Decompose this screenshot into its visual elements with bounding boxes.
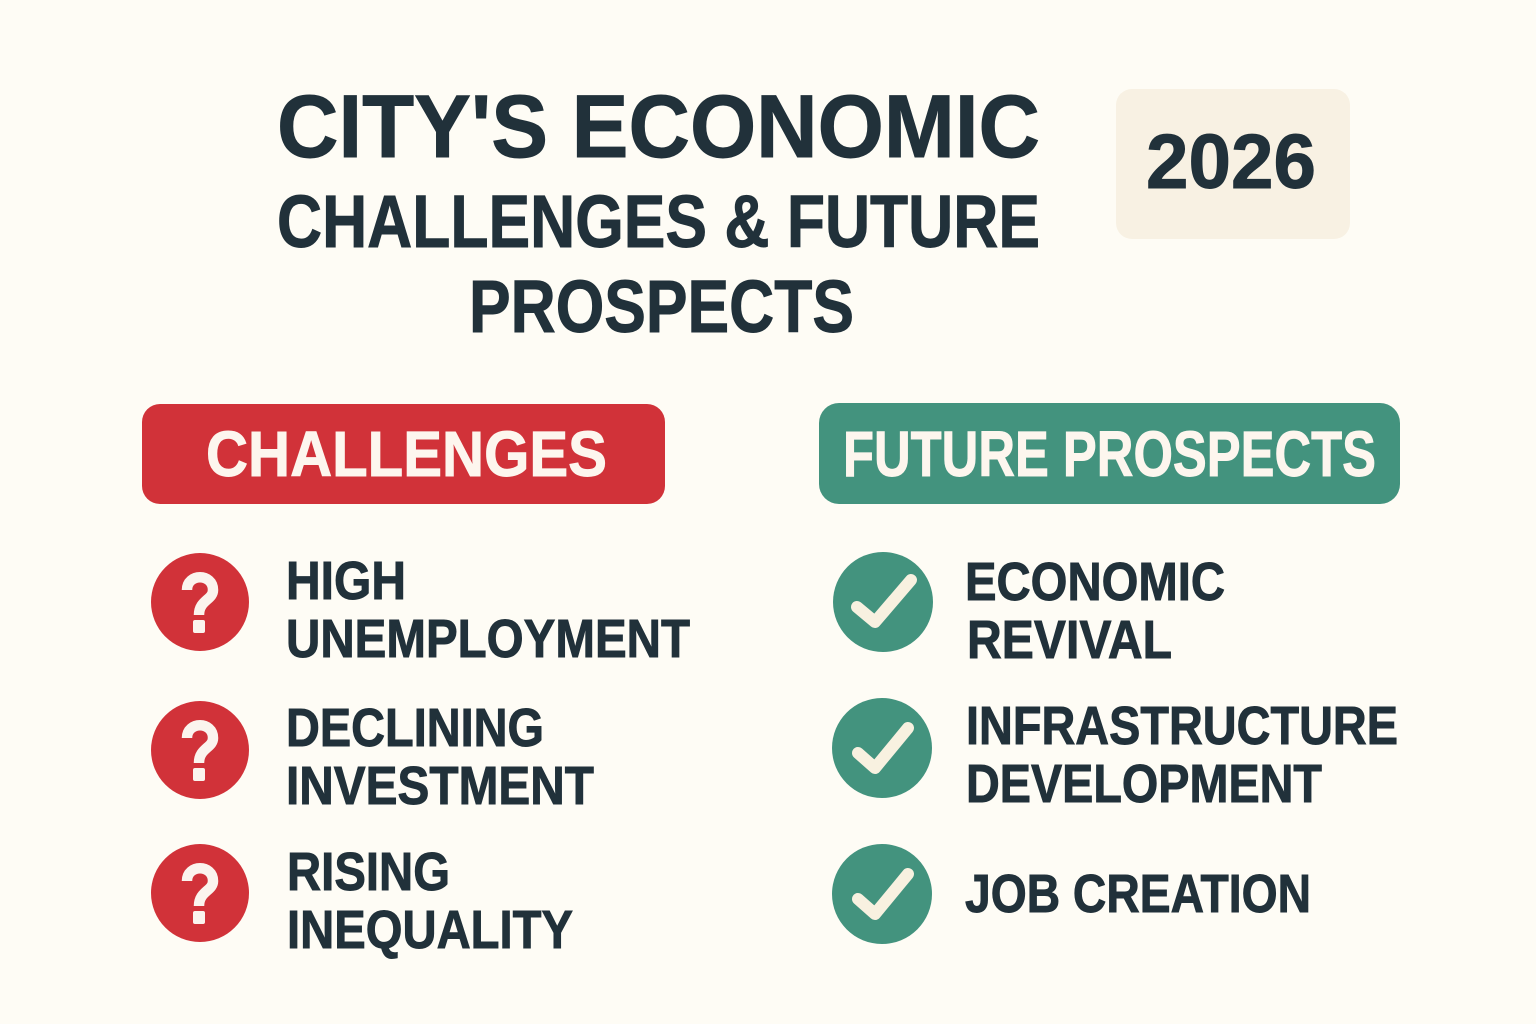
text: high unemployment: HIGH <box>286 551 406 611</box>
text: rising inequality <box>287 842 573 960</box>
title: PROSPECTS <box>469 265 854 348</box>
text: high unemployment: UNEMPLOYMENT <box>286 609 690 669</box>
title: CHALLENGES & FUTURE <box>277 180 1040 263</box>
text: job creation: JOB CREATION <box>965 864 1311 924</box>
text: economic revival: REVIVAL <box>967 610 1172 670</box>
panel: challenges <box>142 404 690 960</box>
text: declining investment: DECLINING <box>286 698 544 758</box>
text: infrastructure development <box>966 696 1398 814</box>
title: CITY'S ECONOMIC <box>277 76 1040 176</box>
text: declining investment: INVESTMENT <box>286 756 594 816</box>
text: economic revival: ECONOMIC <box>965 552 1225 612</box>
heading: challenges: CHALLENGES <box>206 418 607 490</box>
text: declining investment <box>286 698 594 816</box>
text: infrastructure development: DEVELOPMENT <box>966 754 1322 814</box>
text: rising inequality: RISING <box>287 842 450 902</box>
panel: future prospects <box>819 403 1400 944</box>
icon: check mark 2 <box>832 698 932 798</box>
heading: challenges <box>142 404 665 504</box>
text: economic revival <box>965 552 1225 670</box>
icon: question mark 1 <box>151 553 249 651</box>
text: high unemployment <box>286 551 690 669</box>
heading: future prospects: FUTURE PROSPECTS <box>843 418 1376 490</box>
title <box>277 76 1040 348</box>
year badge <box>1116 89 1350 239</box>
text: rising inequality: INEQUALITY <box>287 900 573 960</box>
icon: question mark 3 <box>151 844 249 942</box>
icon: check mark 1 <box>833 552 933 652</box>
icon: check mark 3 <box>832 844 932 944</box>
text: infrastructure development: INFRASTRUCTURE <box>966 696 1398 756</box>
year badge: 2026 <box>1146 119 1316 205</box>
icon: question mark 2 <box>151 701 249 799</box>
heading: future prospects <box>819 403 1400 504</box>
